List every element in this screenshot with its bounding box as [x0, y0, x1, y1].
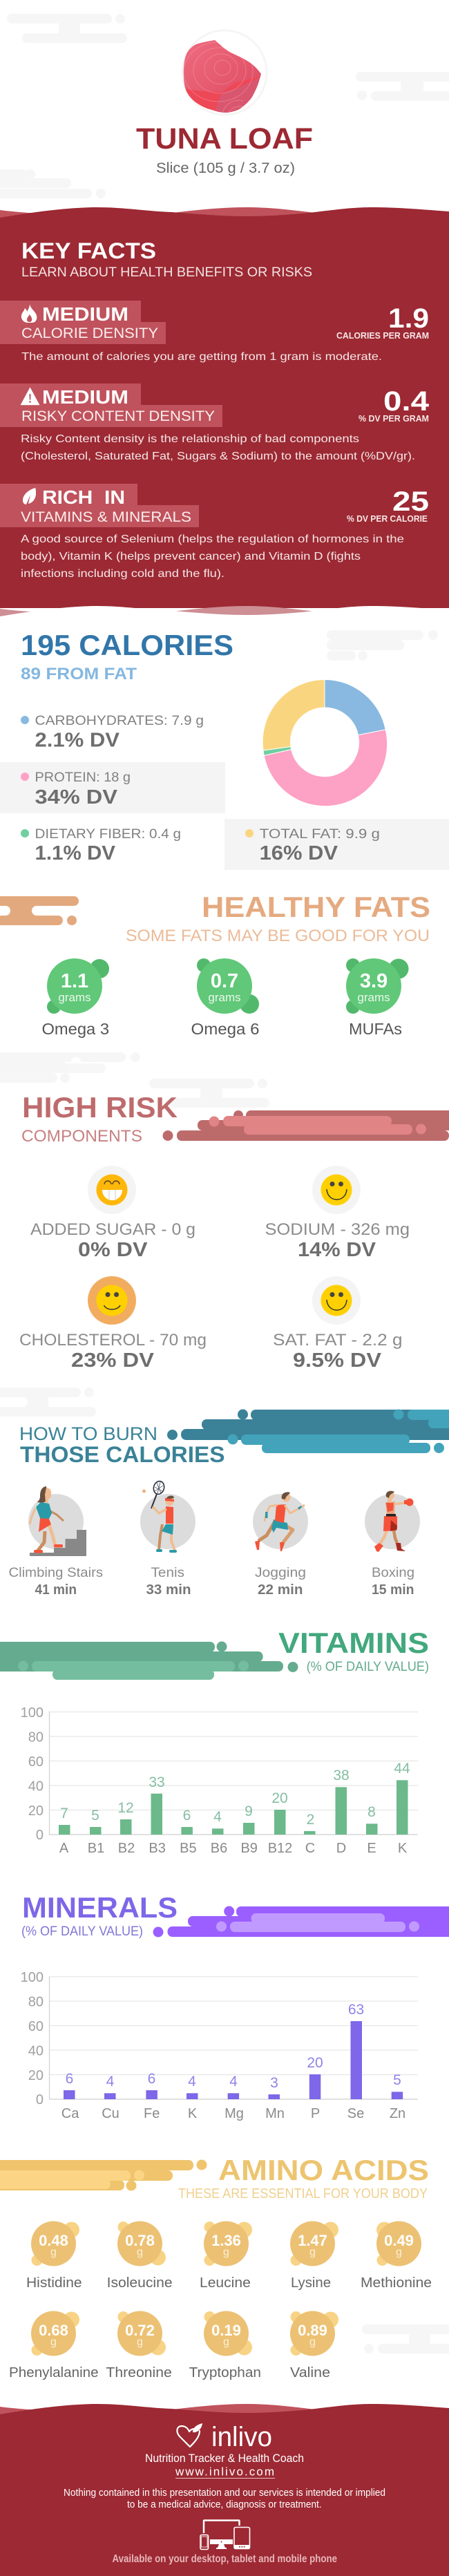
labels: boxing: Boxing — [372, 1566, 414, 1580]
labels: tennis: Tenis — [151, 1566, 184, 1580]
fact: rich in vitamins and minerals: A good source of Selenium (helps the regulation of hormones in the — [21, 533, 404, 545]
item: saturated fat: SAT. FAT - 2.2 g — [273, 1331, 402, 1349]
bar chart: minerals: Fe — [144, 2106, 160, 2121]
bar chart: vitamins: 7 — [60, 1806, 68, 1821]
item: isoleucine: 0.78 — [125, 2232, 155, 2249]
bar chart: vitamins: 33 — [149, 1774, 165, 1790]
bar chart: minerals: 100 — [21, 1970, 44, 1985]
high risk subheading: COMPONENTS — [21, 1127, 142, 1146]
labels: jogging: Jogging — [255, 1566, 306, 1580]
calories heading: 195 CALORIES — [21, 629, 233, 661]
bar chart: minerals — [21, 1970, 418, 2121]
labels: climbing stairs: 41 min — [35, 1582, 77, 1598]
healthy fats subheading: SOME FATS MAY BE GOOD FOR YOU — [126, 927, 430, 945]
item: leucine — [200, 2221, 252, 2291]
logo: inlivo: inlivo — [211, 2422, 272, 2452]
panel: how to burn calories — [8, 1410, 449, 1598]
bar chart: minerals: 4 — [188, 2074, 196, 2090]
fact: risky content density — [0, 383, 430, 462]
bar chart: minerals: 80 — [28, 1994, 44, 2009]
bar chart: vitamins: 20 — [271, 1790, 288, 1806]
item: added sugar: ADDED SUGAR - 0 g — [30, 1220, 195, 1239]
bar chart: vitamins — [21, 1705, 418, 1856]
bar chart: vitamins: 12 — [117, 1800, 134, 1816]
item: leucine: 1.36 — [211, 2232, 241, 2249]
amino acids subheading: THESE ARE ESSENTIAL FOR YOUR BODY — [178, 2186, 428, 2201]
bar chart: vitamins: B12 — [268, 1841, 292, 1856]
legend: total fat — [224, 819, 449, 870]
activity: climbing stairs — [28, 1486, 86, 1556]
item: sodium — [265, 1166, 410, 1261]
item: histidine: 0.48 — [39, 2232, 68, 2249]
fact: risky content density: MEDIUM — [42, 386, 128, 408]
bar chart: minerals: Se — [347, 2106, 364, 2121]
bar chart: minerals: 20 — [307, 2055, 323, 2071]
bar chart: vitamins: B9 — [240, 1841, 258, 1856]
item: sodium: 14% DV — [298, 1239, 376, 1261]
fact: calorie density: MEDIUM — [42, 303, 128, 325]
bar chart: minerals: Mn — [265, 2106, 285, 2121]
bar chart: vitamins: 5 — [91, 1808, 99, 1824]
labels: boxing: 15 min — [372, 1582, 414, 1598]
bar chart: vitamins: 44 — [394, 1761, 410, 1777]
legend: protein: 34% DV — [35, 786, 118, 808]
item: threonine: 0.72 — [125, 2322, 155, 2339]
bar chart: vitamins: B2 — [118, 1841, 135, 1856]
item: methionine: 0.49 — [384, 2232, 414, 2249]
bar chart: vitamins: 20 — [28, 1803, 44, 1819]
decorative banner: green — [0, 1642, 298, 1680]
bar chart: minerals: 40 — [28, 2044, 44, 2059]
item: lysine: g — [309, 2246, 316, 2258]
bar chart: minerals: P — [311, 2106, 320, 2121]
icon: warning triangle — [21, 388, 39, 405]
labels: climbing stairs — [8, 1566, 103, 1598]
badge: omega 6 — [191, 958, 260, 1038]
item: saturated fat — [273, 1276, 402, 1372]
labels: climbing stairs: Climbing Stairs — [8, 1566, 103, 1580]
key facts subheading: LEARN ABOUT HEALTH BENEFITS OR RISKS — [21, 265, 312, 280]
logo: inlivo — [177, 2422, 272, 2452]
fact: rich in vitamins and minerals — [0, 484, 429, 580]
burn heading line 2: THOSE CALORIES — [20, 1442, 225, 1467]
legend: protein — [0, 762, 225, 813]
bar chart: vitamins: D — [336, 1841, 346, 1856]
item: phenylalanine — [9, 2311, 99, 2380]
fact: rich in vitamins and minerals: infections including cold and the flu). — [21, 568, 224, 580]
bar chart: minerals: 20 — [28, 2068, 44, 2083]
legend: carbohydrates: 2.1% DV — [35, 730, 120, 752]
item: isoleucine: Isoleucine — [107, 2275, 173, 2291]
item: phenylalanine: 0.68 — [39, 2322, 68, 2339]
legend: carbohydrates — [21, 713, 204, 752]
availability note: Available on your desktop, tablet and mobile phone — [112, 2553, 337, 2565]
bar chart: vitamins: 60 — [28, 1754, 44, 1770]
item: methionine — [361, 2221, 432, 2291]
item: phenylalanine: Phenylalanine — [9, 2365, 99, 2380]
labels: tennis — [146, 1566, 191, 1598]
bar chart: minerals: 6 — [66, 2071, 73, 2087]
item: added sugar: 0% DV — [78, 1239, 148, 1261]
fact: calorie density: The amount of calories you are getting from 1 gram is moderate. — [21, 351, 382, 363]
website link: www.inlivo.com — [175, 2465, 274, 2478]
fact: rich in vitamins and minerals: 25 — [392, 486, 429, 517]
fact: rich in vitamins and minerals: body), Vitamin K (helps prevent cancer) and Vitamin D (fights — [21, 551, 361, 562]
item: tryptophan: g — [223, 2336, 229, 2348]
legend: total fat: TOTAL FAT: 9.9 g — [260, 826, 380, 842]
item: valine — [290, 2311, 338, 2380]
badge: omega 3: grams — [58, 991, 91, 1004]
panel: calories — [0, 629, 449, 870]
badge: omega 3 — [41, 958, 109, 1038]
badge: omega 3: 1.1 — [61, 970, 88, 992]
legend: dietary fiber: 1.1% DV — [35, 842, 116, 864]
bar chart: vitamins: E — [367, 1841, 376, 1856]
legend: total fat: 16% DV — [260, 842, 338, 864]
disclaimer — [64, 2487, 385, 2510]
labels: jogging — [255, 1566, 306, 1598]
panel: amino acids — [0, 2154, 432, 2380]
fact: rich in vitamins and minerals: RICH IN — [42, 486, 125, 508]
badge: omega 6: Omega 6 — [191, 1020, 260, 1038]
activity: boxing — [365, 1491, 420, 1552]
key facts heading: KEY FACTS — [21, 238, 156, 263]
bar chart: vitamins: 40 — [28, 1779, 44, 1794]
item: leucine: Leucine — [200, 2275, 251, 2291]
bar chart: minerals: 4 — [229, 2074, 238, 2090]
badge: omega 3: Omega 3 — [41, 1020, 109, 1038]
item: tryptophan: Tryptophan — [189, 2365, 261, 2380]
bar chart: minerals: 0 — [36, 2092, 44, 2108]
icon: devices — [200, 2521, 250, 2550]
bar chart: minerals: 60 — [28, 2019, 44, 2034]
bar chart: minerals: 63 — [348, 2002, 364, 2018]
bar chart: minerals: 6 — [148, 2071, 155, 2087]
fact: calorie density: CALORIES PER GRAM — [336, 330, 429, 341]
fact: calorie density — [0, 301, 429, 363]
healthy fats heading: HEALTHY FATS — [202, 891, 430, 923]
vitamins heading: VITAMINS — [278, 1627, 429, 1659]
bar chart: vitamins: K — [398, 1841, 408, 1856]
bar chart: minerals: 5 — [393, 2072, 401, 2088]
fact: calorie density: CALORIE DENSITY — [21, 325, 158, 341]
item: methionine: Methionine — [361, 2275, 432, 2291]
calories from fat: 89 FROM FAT — [21, 665, 137, 683]
icon: leaf — [23, 488, 36, 504]
legend: dietary fiber: DIETARY FIBER: 0.4 g — [35, 826, 181, 842]
icon: flame — [21, 304, 37, 323]
item: leucine: g — [223, 2246, 229, 2258]
item: saturated fat: 9.5% DV — [293, 1349, 382, 1372]
fact: calorie density: 1.9 — [388, 303, 429, 334]
bar chart: vitamins: 2 — [307, 1812, 314, 1828]
bar chart: minerals: K — [188, 2106, 198, 2121]
donut chart — [262, 680, 388, 806]
disclaimer: Nothing contained in this presentation and our services is intended or implied — [64, 2487, 385, 2499]
activity: jogging — [253, 1492, 308, 1551]
item: cholesterol — [19, 1276, 207, 1372]
decorative banner: red — [163, 1110, 449, 1141]
bar chart: minerals: Mg — [224, 2106, 244, 2121]
item: histidine — [26, 2221, 82, 2291]
bar chart: minerals: 4 — [106, 2074, 115, 2090]
item: threonine: g — [137, 2336, 143, 2348]
item: phenylalanine: g — [50, 2336, 57, 2348]
activity: tennis — [140, 1480, 195, 1553]
bar chart: vitamins: B1 — [88, 1841, 104, 1856]
labels: jogging: 22 min — [258, 1582, 303, 1598]
bar chart: vitamins: C — [305, 1841, 315, 1856]
bar chart: vitamins: 38 — [333, 1768, 350, 1783]
vitamins subheading: (% OF DAILY VALUE) — [307, 1660, 429, 1674]
bar chart: vitamins: 80 — [28, 1730, 44, 1745]
bar chart: vitamins: B5 — [180, 1841, 197, 1856]
item: added sugar — [30, 1166, 195, 1261]
fact: risky content density: 0.4 — [383, 386, 430, 417]
item: cholesterol: 23% DV — [71, 1349, 155, 1372]
bar chart: vitamins: A — [59, 1841, 69, 1856]
bar chart: vitamins: 0 — [36, 1828, 44, 1843]
bar chart: minerals: Ca — [61, 2106, 79, 2121]
title: TUNA LOAF — [136, 122, 313, 155]
bar chart: vitamins: B3 — [149, 1841, 166, 1856]
item: isoleucine: g — [137, 2246, 143, 2258]
panel: healthy fats — [0, 891, 430, 1038]
item: lysine: Lysine — [291, 2275, 331, 2291]
item: histidine: g — [50, 2246, 57, 2258]
bar chart: vitamins: 8 — [367, 1804, 376, 1820]
panel: minerals — [21, 1891, 449, 2121]
fact: risky content density: (Cholesterol, Saturated Fat, Sugars & Sodium) to the amount (%DV/gr). — [21, 451, 415, 462]
high risk heading: HIGH RISK — [22, 1091, 178, 1124]
minerals heading: MINERALS — [22, 1891, 178, 1924]
item: lysine: 1.47 — [298, 2232, 327, 2249]
bar chart: minerals: Zn — [390, 2106, 405, 2121]
item: tryptophan — [189, 2311, 261, 2380]
item: tryptophan: 0.19 — [211, 2322, 241, 2339]
panel: high risk components — [19, 1091, 449, 1372]
burn heading line 1: HOW TO BURN — [19, 1423, 157, 1444]
fact: rich in vitamins and minerals: VITAMINS & MINERALS — [21, 509, 191, 525]
decorative banner: yellow — [0, 2160, 207, 2190]
fact: rich in vitamins and minerals: % DV PER CALORIE — [347, 513, 428, 524]
item: sodium: SODIUM - 326 mg — [265, 1220, 410, 1239]
panel: footer — [0, 2404, 449, 2576]
serving size: Slice (105 g / 3.7 oz) — [156, 160, 295, 176]
badge: MUFAs — [346, 958, 409, 1038]
badge: MUFAs: 3.9 — [360, 970, 388, 992]
item: cholesterol: CHOLESTEROL - 70 mg — [19, 1331, 207, 1349]
item: threonine — [106, 2311, 172, 2380]
legend: carbohydrates: CARBOHYDRATES: 7.9 g — [35, 713, 204, 728]
badge: omega 6: grams — [208, 991, 241, 1004]
disclaimer: to be a medical advice, diagnosis or treatment. — [127, 2499, 322, 2510]
panel: key facts — [0, 207, 449, 625]
minerals subheading: (% OF DAILY VALUE) — [21, 1924, 143, 1939]
amino acids heading: AMINO ACIDS — [218, 2154, 429, 2186]
bar chart: vitamins: 100 — [21, 1705, 44, 1721]
legend: protein: PROTEIN: 18 g — [35, 770, 131, 785]
decorative banner: purple — [153, 1906, 449, 1938]
item: threonine: Threonine — [106, 2365, 172, 2380]
fact: risky content density: Risky Content density is the relationship of bad components — [21, 433, 359, 445]
badge: MUFAs: MUFAs — [349, 1020, 402, 1038]
fact: risky content density: % DV PER GRAM — [359, 413, 429, 424]
item: valine: Valine — [290, 2365, 330, 2380]
item: lysine — [290, 2221, 338, 2291]
item: valine: 0.89 — [298, 2322, 327, 2339]
badge: MUFAs: grams — [357, 991, 390, 1004]
food image: tuna slice — [180, 30, 267, 117]
bar chart: vitamins: 9 — [245, 1803, 253, 1819]
decorative banner: teal — [167, 1410, 449, 1453]
labels: tennis: 33 min — [146, 1582, 191, 1598]
panel: vitamins — [0, 1627, 429, 1856]
item: valine: g — [309, 2336, 316, 2348]
tagline: Nutrition Tracker & Health Coach — [145, 2452, 304, 2465]
badge: omega 6: 0.7 — [211, 970, 238, 992]
bar chart: vitamins: 4 — [213, 1809, 222, 1825]
labels: boxing — [372, 1566, 414, 1598]
bar chart: vitamins: 6 — [183, 1808, 191, 1824]
bar chart: minerals: Cu — [102, 2106, 120, 2121]
bar chart: minerals: 3 — [270, 2075, 278, 2091]
item: isoleucine — [107, 2221, 173, 2291]
fact: risky content density: RISKY CONTENT DENSITY — [21, 408, 215, 424]
item: histidine: Histidine — [26, 2275, 82, 2291]
item: methionine: g — [396, 2246, 402, 2258]
decorative banner: orange — [0, 896, 79, 925]
bar chart: vitamins: B6 — [211, 1841, 227, 1856]
legend: dietary fiber — [21, 826, 181, 864]
